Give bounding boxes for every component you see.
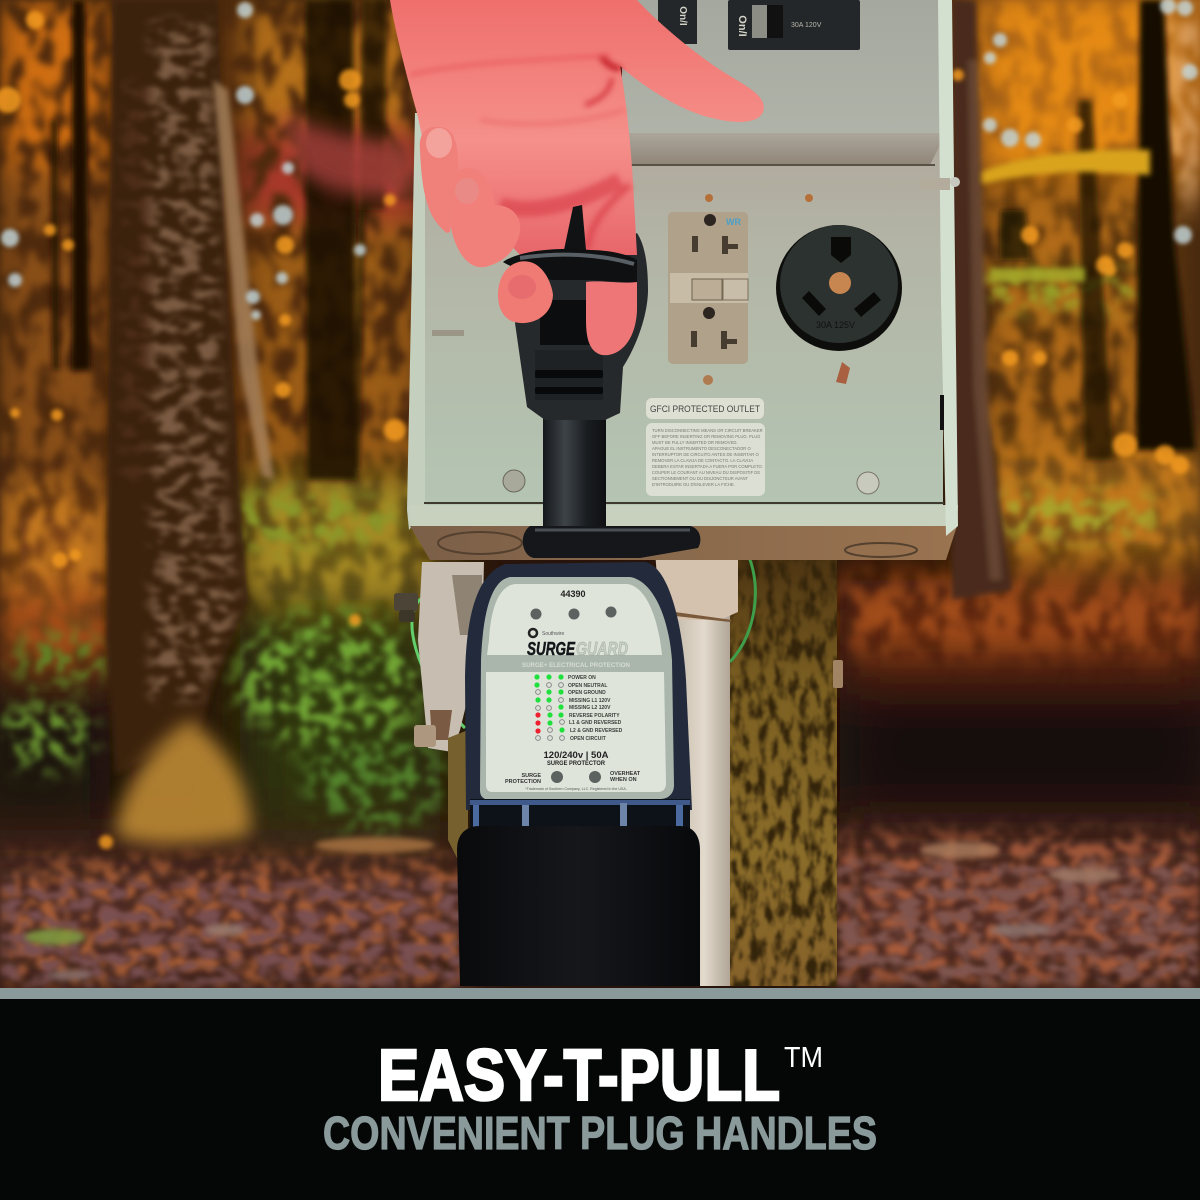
- red maple branch: [282, 112, 412, 196]
- wooden post: [730, 560, 843, 986]
- green ground wire: [412, 557, 755, 728]
- warning label: SECTIONNEMENT OU DU DISJONCTEUR AVANT: [652, 476, 749, 481]
- pale leaves and moss on the ground: [25, 837, 1121, 980]
- status labels: OPEN NEUTRAL: [568, 683, 607, 689]
- status labels: [568, 675, 623, 742]
- brand name: SURGE: [527, 639, 576, 659]
- ground of fallen leaves: [0, 835, 1200, 985]
- fourth finger: [586, 281, 637, 355]
- GFCI label: GFCI PROTECTED OUTLET: [650, 404, 760, 415]
- rating text: SURGE PROTECTOR: [547, 761, 606, 767]
- trademark line: *Trademark of Southern Company, LLC. Registered in the USA.: [525, 787, 627, 791]
- status labels: MISSING L1 120V: [569, 698, 611, 704]
- first finger: [420, 127, 458, 233]
- indicator captions: OVERHEAT: [610, 771, 641, 777]
- Southwire logo: Southwire: [542, 631, 564, 637]
- brand name: [527, 639, 628, 659]
- rating text: [544, 750, 609, 767]
- bottom caption band: [0, 988, 1200, 1200]
- background tree trunks: [50, 0, 1196, 600]
- warning label: DEBERA ESTAR INSERTADA A FUERA POR COMPLETO.: [652, 464, 763, 469]
- left flange: [407, 113, 425, 530]
- protection band: SURGE+ ELECTRICAL PROTECTION: [522, 662, 630, 669]
- third finger: [498, 261, 553, 323]
- left mounting bracket: [394, 562, 484, 880]
- status labels: POWER ON: [568, 675, 596, 681]
- warning label: REMOVER LA CLAVIJA DE CONTACTO. LA CLAVIJA: [652, 458, 753, 463]
- yellow maple branch: [982, 150, 1150, 282]
- warning label: D'INTRODUIRE OU D'ENLEVER LA FICHE.: [652, 482, 735, 487]
- protection band: [482, 657, 670, 671]
- box bottom band: [409, 505, 958, 526]
- status labels: MISSING L2 120V: [569, 705, 611, 711]
- warning label: APAGUE EL INSTRUMENTO DESCONECTADOR O: [652, 446, 751, 451]
- handle tab: [564, 205, 586, 250]
- status labels: L2 & GND REVERSED: [570, 728, 623, 734]
- indicator captions: PROTECTION: [505, 779, 541, 785]
- model number: 44390: [560, 589, 586, 599]
- screws and rust marks: [432, 194, 879, 494]
- box underside: [410, 526, 957, 560]
- rating text: 120/240v | 50A: [544, 750, 609, 761]
- palm creases and shadows: [410, 55, 630, 250]
- status labels: L1 & GND REVERSED: [569, 720, 622, 726]
- sunlit amber patch at the trunk base: [115, 720, 251, 844]
- right side flange: [938, 0, 958, 536]
- breakers: On/I: [736, 15, 748, 37]
- subheading: CONVENIENT PLUG HANDLES: [323, 1107, 877, 1159]
- 30A receptacle: 30A 125V: [816, 320, 855, 330]
- mottled foliage greens: [0, 272, 1170, 830]
- pull handle ring: [503, 249, 637, 283]
- GFCI outlet: [668, 212, 748, 364]
- heading: TM: [784, 1042, 823, 1074]
- indicator captions: SURGE: [521, 773, 541, 779]
- lit trunk edge: [213, 80, 274, 480]
- breakers: 30A 120V: [791, 22, 822, 29]
- indicator captions: [505, 771, 641, 785]
- white conduit pipe: [655, 543, 738, 986]
- device body: [465, 562, 692, 810]
- GFCI outlet: WR: [726, 217, 741, 227]
- lid underside: [622, 133, 946, 165]
- GFCI label: [646, 398, 764, 419]
- surge guard device: [457, 562, 700, 986]
- pedestal lid: [622, 0, 946, 133]
- blue hinge row: [470, 799, 690, 829]
- warning label: TURN DISCONNECTING MEANS OR CIRCUIT BREAKER: [652, 428, 763, 433]
- status labels: OPEN GROUND: [568, 690, 606, 696]
- indicator captions: WHEN ON: [610, 777, 637, 783]
- indicator domes: [530, 606, 616, 783]
- flip cover: [457, 826, 700, 986]
- hand pressing the plug handle: [390, 0, 764, 355]
- box face: [425, 113, 943, 505]
- 30A receptacle: [776, 225, 902, 351]
- mottled amber bokeh: [0, 0, 1200, 660]
- grey rule: [0, 988, 1200, 999]
- brand name: GUARD: [576, 639, 628, 659]
- Southwire logo: [529, 629, 564, 637]
- foreground tree trunk: [106, 0, 248, 775]
- underside knockout circles: [438, 532, 917, 557]
- warning label: OFF BEFORE INSERTING OR REMOVING PLUG. PLUG: [652, 434, 760, 439]
- device faceplate: [480, 577, 674, 800]
- power pedestal box: [407, 0, 960, 560]
- second finger: [449, 168, 520, 267]
- status labels: OPEN CIRCUIT: [570, 736, 606, 742]
- warning label: COUPER LE COURANT AU NIVEAU DU DISPOSITIF DE: [652, 470, 760, 475]
- bokeh highlights: [0, 0, 1198, 849]
- breakers: [658, 0, 860, 50]
- heading: EASY-T-PULL: [378, 1036, 780, 1116]
- breakers: On/I: [677, 6, 688, 26]
- warning label: MUST BE FULLY INSERTED OR REMOVED.: [652, 440, 738, 445]
- status LED matrix: [534, 674, 565, 740]
- palm and pointing finger: [390, 0, 764, 255]
- warning label: [646, 423, 765, 496]
- trunk bark mottling: [120, 20, 240, 700]
- status labels: REVERSE POLARITY: [569, 713, 620, 719]
- warning label: INTERRUPTOR DE CIRCUITO ANTES DE INSERTAR O: [652, 452, 759, 457]
- plug body: [515, 233, 648, 420]
- plug stem: [523, 416, 700, 558]
